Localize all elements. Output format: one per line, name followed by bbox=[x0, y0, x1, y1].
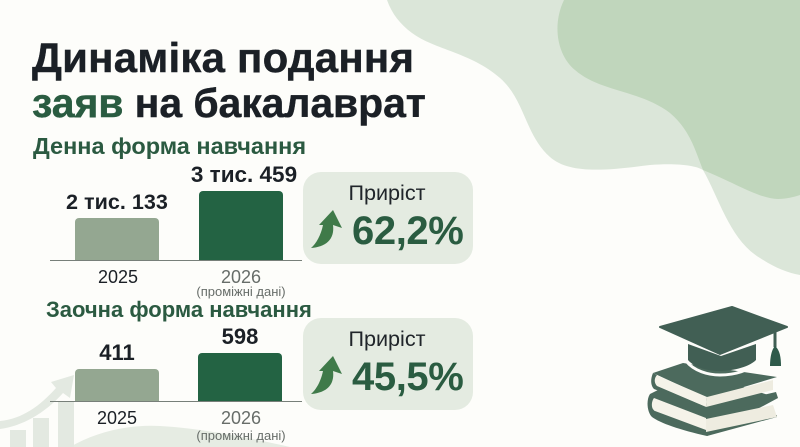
icon: up arrow bbox=[311, 210, 342, 248]
value 2025: 411 bbox=[99, 340, 135, 365]
heading: part-time: Заочна форма навчання bbox=[46, 297, 312, 322]
note: (проміжні дані) bbox=[196, 284, 286, 299]
value 2026: 598 bbox=[222, 324, 258, 349]
value 2025: 2 тис. 133 bbox=[66, 189, 168, 214]
chart: full-time bbox=[50, 162, 302, 299]
bottom book bbox=[648, 386, 778, 436]
tassel bbox=[774, 332, 776, 347]
value: 45,5% bbox=[352, 355, 463, 399]
title: заяв на бакалаврат bbox=[32, 80, 426, 126]
axis line bbox=[50, 401, 302, 402]
year 2026: 2026 bbox=[221, 408, 261, 428]
label: Приріст bbox=[348, 326, 426, 351]
note: (проміжні дані) bbox=[196, 428, 286, 443]
value: 62,2% bbox=[352, 209, 463, 253]
bar 2025 bbox=[75, 218, 159, 260]
year 2026: 2026 bbox=[221, 267, 261, 287]
icon: up arrow bbox=[311, 356, 342, 394]
title bbox=[32, 34, 426, 126]
chart: part-time bbox=[50, 324, 302, 443]
growth panel: part-time bbox=[303, 318, 473, 410]
heading: full-time: Денна форма навчання bbox=[33, 133, 306, 159]
axis line bbox=[50, 260, 302, 261]
year 2025: 2025 bbox=[98, 267, 138, 287]
bar 2025 bbox=[75, 369, 159, 401]
cap top bbox=[660, 307, 787, 354]
title: Динаміка подання bbox=[32, 34, 414, 81]
label: Приріст bbox=[348, 180, 426, 205]
value 2026: 3 тис. 459 bbox=[191, 162, 297, 187]
bar 2026 bbox=[199, 191, 283, 260]
growth panel: full-time bbox=[303, 172, 473, 264]
bar 2026 bbox=[198, 353, 282, 401]
year 2025: 2025 bbox=[97, 408, 137, 428]
cap base bbox=[688, 344, 756, 371]
icon: books and graduation cap bbox=[648, 306, 788, 436]
top book bbox=[651, 363, 778, 415]
